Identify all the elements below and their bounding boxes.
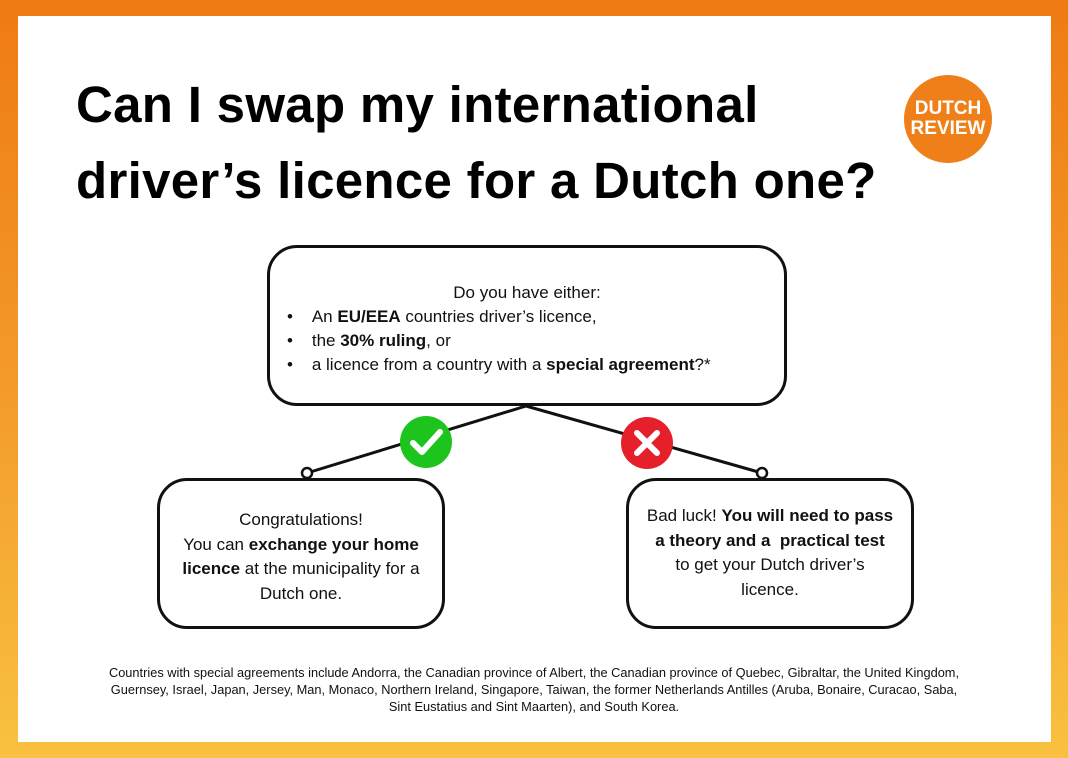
footnote: Countries with special agreements include Andorra, the Canadian province of Albert, the Canadian province of Quebec, Gibraltar, the United Kingdom, <box>109 665 959 680</box>
question box: Do you have either: <box>453 283 601 302</box>
question box: • a licence from a country with a special agreement?* <box>287 355 711 374</box>
no box: Bad luck! You will need to pass <box>647 506 893 525</box>
title: Can I swap my international <box>76 76 759 133</box>
question box <box>267 245 787 406</box>
footnote: Sint Eustatius and Sint Maarten), and South Korea. <box>389 699 679 714</box>
title <box>76 76 877 209</box>
title: driver’s licence for a Dutch one? <box>76 152 877 209</box>
logo: Dutch Review: REVIEW <box>911 118 985 139</box>
question box: • the 30% ruling, or <box>287 331 451 350</box>
question box: • An EU/EEA countries driver’s licence, <box>287 307 597 326</box>
yes box <box>157 478 445 629</box>
no box: to get your Dutch driver’s <box>675 555 865 574</box>
logo: Dutch Review <box>904 75 992 163</box>
no box: a theory and a practical test <box>655 530 885 550</box>
yes box: You can exchange your home licence at the municipality for a Dutch one. <box>182 534 420 602</box>
yes box: Congratulations! <box>239 510 363 529</box>
logo: Dutch Review: DUTCH <box>915 98 981 119</box>
no box <box>626 478 914 629</box>
footnote: Guernsey, Israel, Japan, Jersey, Man, Monaco, Northern Ireland, Singapore, Taiwan, the former Netherlands Antilles (Aruba, Bonaire, Curacao, Saba, <box>111 682 957 697</box>
footnote <box>109 665 959 714</box>
no box: licence. <box>741 580 799 598</box>
